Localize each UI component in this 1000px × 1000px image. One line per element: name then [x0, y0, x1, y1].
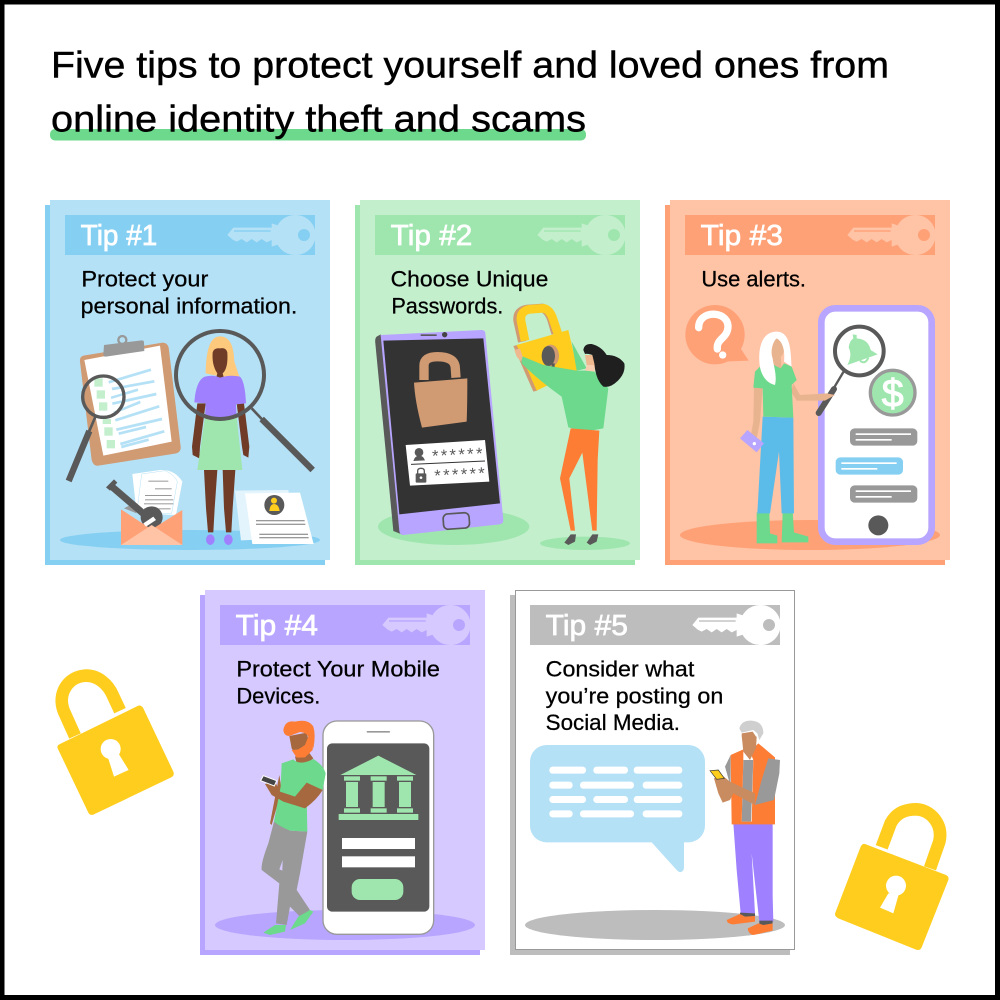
title	[50, 44, 889, 140]
tip 3 header band	[685, 215, 935, 255]
icon: woman holding padlock	[513, 308, 625, 545]
tip 4 header band: Tip #4	[236, 610, 318, 642]
icon: speech bubble	[530, 745, 705, 872]
tip 1 text: Protect your	[81, 267, 208, 292]
tip 2 text: Passwords.	[391, 293, 503, 318]
icon: padlock right	[835, 809, 949, 950]
tip 1 header band	[65, 215, 315, 255]
tip 3 text: Use alerts.	[701, 267, 806, 292]
tip 2 text	[391, 267, 548, 318]
icon: woman with white hair	[740, 332, 835, 543]
tip 5 header band	[530, 605, 780, 645]
tip 4 text	[236, 657, 440, 708]
tip 2 header band	[375, 215, 625, 255]
icon: profile documents	[235, 490, 314, 544]
icon: smartphone with alerts	[821, 308, 932, 542]
title: Five tips to protect yourself and loved ones from	[51, 44, 889, 86]
tip 5 header band: Tip #5	[546, 610, 628, 642]
tip 3 header band: Tip #3	[701, 220, 783, 252]
panel: tip 4	[200, 590, 485, 955]
tip 1 text: personal information.	[81, 293, 297, 318]
icon: smartphone with login: ******	[434, 464, 488, 485]
icon: padlock left	[57, 676, 174, 815]
icon: clipboard	[80, 336, 181, 466]
tip 5 text: Consider what	[546, 657, 694, 682]
tip 1 ground	[60, 530, 320, 550]
icon: smartphone with login: ******	[432, 444, 485, 466]
tip 4 header band	[220, 605, 470, 645]
icon: smartphone with alerts: $	[882, 372, 904, 416]
panel: tip 3	[665, 200, 950, 565]
icon: question speech bubble	[685, 305, 749, 364]
panel: tip 5	[510, 590, 794, 955]
icon: envelope with papers and key	[106, 470, 182, 545]
tip 4 ground	[215, 910, 475, 940]
icon: man with beard using phone	[261, 721, 326, 935]
icon: man in orange vest with phone	[710, 721, 780, 935]
tip 5 text: Social Media.	[546, 710, 680, 735]
icon: large magnifier	[176, 331, 313, 470]
tip 5 ground	[525, 910, 785, 940]
tip 5 text	[546, 657, 723, 735]
tip 1 text	[81, 267, 297, 318]
tip 2 header band: Tip #2	[391, 220, 472, 252]
panel: tip 2	[355, 200, 640, 565]
icon: magnifier over bell	[819, 327, 884, 413]
icon: smartphone with bank	[323, 721, 434, 934]
tip 2 ground	[378, 508, 630, 550]
icon: smartphone with login	[375, 330, 503, 535]
title: online identity theft and scams	[51, 98, 586, 140]
tip 2 text: Choose Unique	[391, 267, 548, 292]
tip 1 header band: Tip #1	[81, 220, 157, 252]
tip 3 ground	[680, 520, 940, 550]
tip 4 text: Devices.	[236, 683, 320, 708]
tip 4 text: Protect Your Mobile	[236, 657, 440, 682]
tip 5 text: you’re posting on	[546, 683, 723, 708]
panel: tip 1	[45, 200, 330, 565]
icon: woman with blonde hair	[192, 336, 249, 545]
icon: small magnifier	[69, 376, 124, 481]
